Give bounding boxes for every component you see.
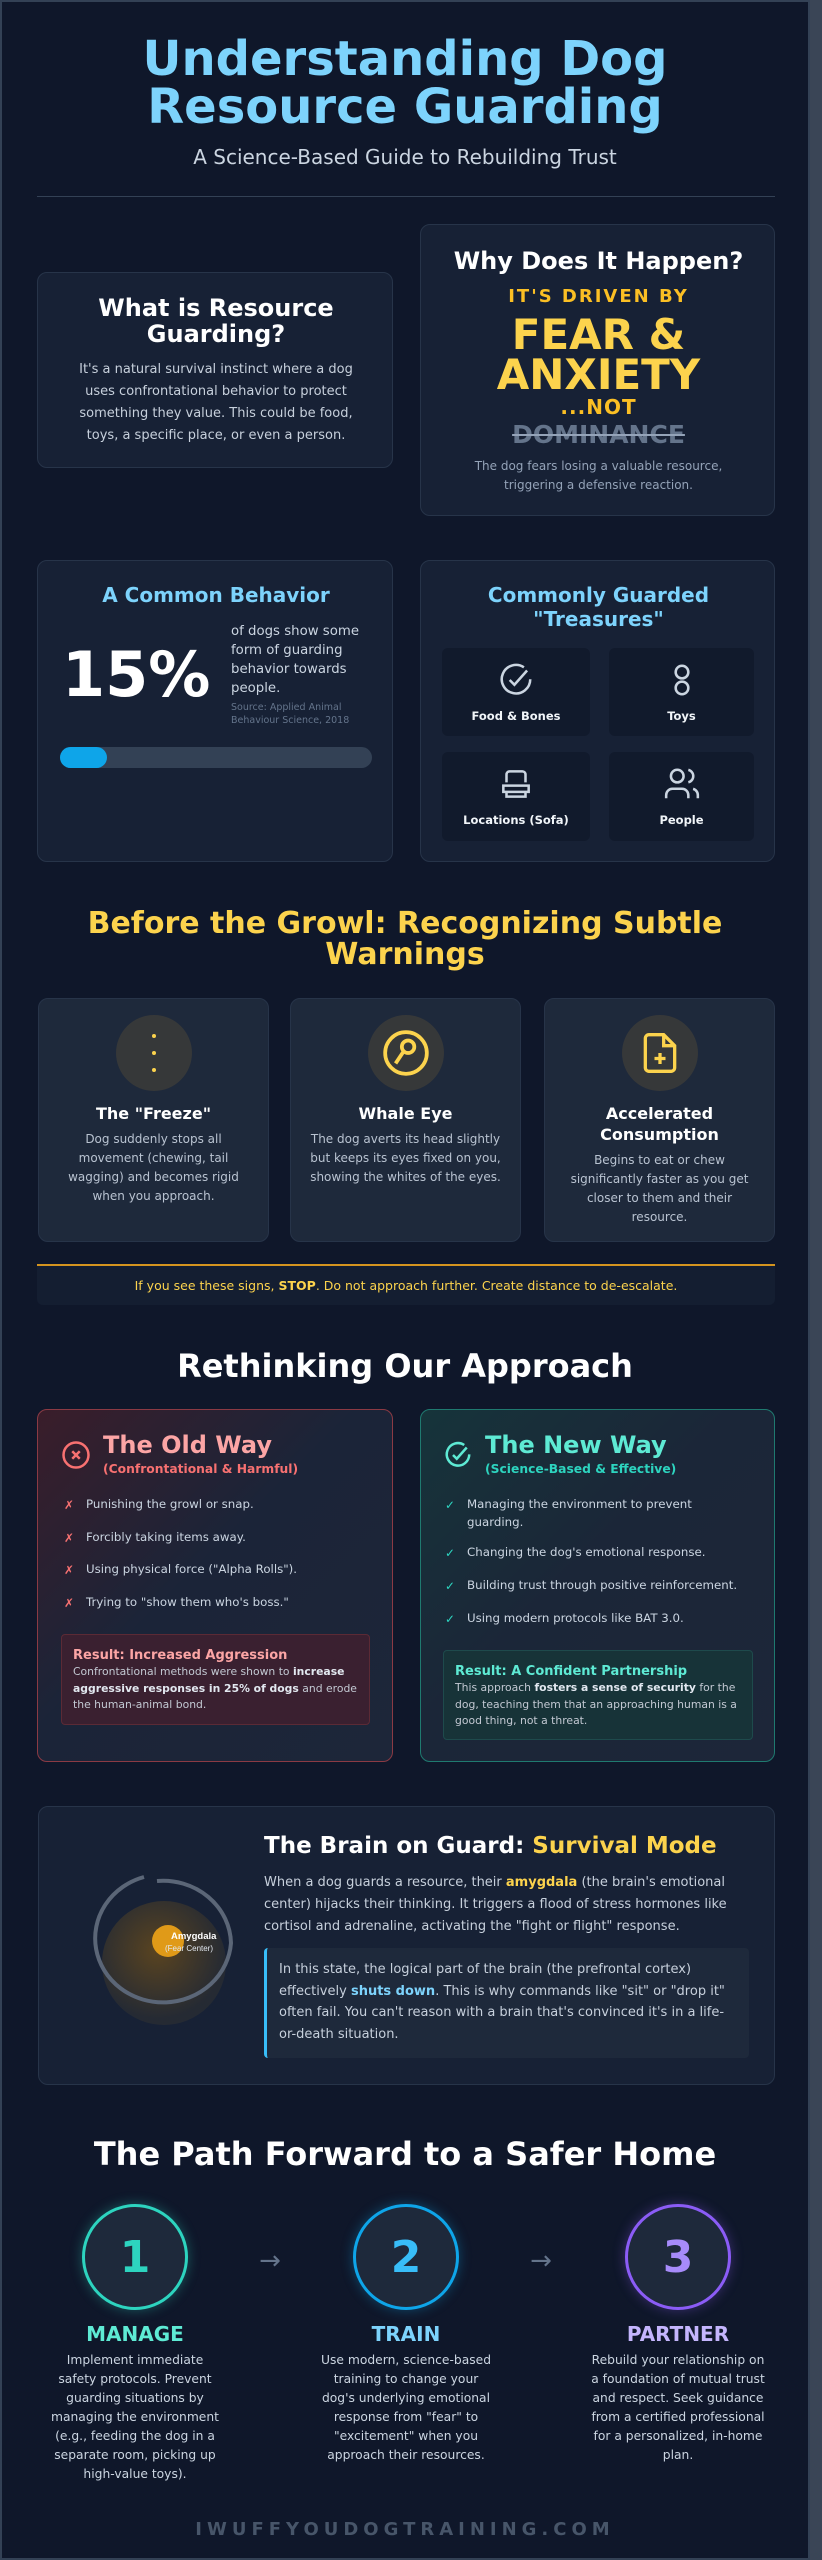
- brain diagram: (Fear Center): [165, 1944, 213, 1953]
- list: Forcibly taking items away.: [86, 1530, 246, 1544]
- tile: food: Food & Bones: [472, 709, 560, 723]
- heading: [98, 294, 334, 348]
- card: accelerated consumption: [544, 998, 775, 1242]
- tile: locations: Locations (Sofa): [463, 813, 569, 827]
- panel: brain on guard: [38, 1806, 775, 2085]
- title: [142, 31, 668, 135]
- heading: The Old Way: [103, 1431, 272, 1459]
- heading: "Treasures": [533, 607, 664, 631]
- heading: [488, 583, 709, 631]
- tile: people: [609, 752, 754, 841]
- heading: What is Resource: [98, 294, 334, 322]
- list: [64, 1497, 297, 1610]
- tile: toys: Toys: [667, 709, 696, 723]
- list: ✓: [445, 1579, 455, 1593]
- heading: rethinking: Rethinking Our Approach: [177, 1347, 633, 1385]
- caption: The dog fears losing a valuable resource, triggering a defensive reaction.: [475, 459, 722, 492]
- panel: what is resource guarding: [37, 272, 393, 468]
- result box: Result: A Confident Partnership: [455, 1664, 687, 1679]
- list: Building trust through positive reinforcement.: [467, 1578, 737, 1592]
- tile: locations: [442, 752, 590, 841]
- result box: Result: Increased Aggression: [73, 1648, 287, 1663]
- panel: common behavior: [37, 560, 393, 862]
- fear & anxiety: ANXIETY: [497, 350, 700, 399]
- fear & anxiety: FEAR &: [512, 310, 685, 359]
- list: ✓: [445, 1612, 455, 1626]
- list: ✗: [64, 1563, 74, 1577]
- not dominance: [512, 395, 685, 449]
- subheading: (Confrontational & Harmful): [103, 1462, 298, 1476]
- list: Using modern protocols like BAT 3.0.: [467, 1611, 684, 1625]
- driven by text: IT'S DRIVEN BY: [508, 286, 689, 307]
- step: train: 2: [391, 2232, 421, 2282]
- subheading: (Science-Based & Effective): [485, 1462, 676, 1476]
- text: TRAIN: [372, 2322, 440, 2346]
- step: partner: 3: [663, 2232, 693, 2282]
- card: accelerated consumption: Accelerated: [606, 1104, 713, 1123]
- result box: [443, 1650, 753, 1740]
- title: Resource Guarding: [147, 79, 663, 135]
- heading: before the growl: Warnings: [325, 937, 485, 972]
- stat 15%: 15%: [62, 638, 210, 711]
- footer: IWUFFYOUDOGTRAINING.COM: [195, 2519, 615, 2540]
- arrow: →: [530, 2246, 552, 2276]
- subtitle: A Science-Based Guide to Rebuilding Trust: [193, 145, 617, 169]
- panel: commonly guarded treasures: [420, 560, 775, 862]
- text block: When a dog guards a resource, their amygdala (the brain's emotional center) hijacks their thinking. It triggers a flood of stress hormones like cortisol and adrenaline, activating the "fight or flight" response.: [264, 1875, 727, 1934]
- heading: path forward: The Path Forward to a Safer Home: [94, 2135, 716, 2173]
- not dominance: DOMINANCE: [512, 420, 685, 449]
- card: whale eye: [290, 998, 521, 1242]
- icon: eye search: [368, 1015, 444, 1091]
- result box: Confrontational methods were shown to increase aggressive responses in 25% of dogs and erode the human-animal bond.: [73, 1665, 357, 1711]
- icon: x circle: [62, 1441, 90, 1469]
- heading: Guarding?: [147, 320, 285, 348]
- icon: dots: [116, 1015, 192, 1091]
- arrow: →: [259, 2246, 281, 2276]
- heading: The New Way: [485, 1431, 667, 1459]
- step: partner: [591, 2198, 765, 2462]
- step: manage: 1: [120, 2232, 150, 2282]
- list: Managing the environment to prevent guarding.: [467, 1497, 692, 1529]
- brain diagram: [93, 1875, 233, 2025]
- card: freeze: The "Freeze": [96, 1104, 211, 1123]
- heading: A Common Behavior: [102, 583, 330, 607]
- text: MANAGE: [86, 2322, 184, 2346]
- list: Changing the dog's emotional response.: [467, 1545, 706, 1559]
- text: PARTNER: [627, 2322, 729, 2346]
- text: Rebuild your relationship on a foundation of mutual trust and respect. Seek guidance from a certified professional for a personalized, in-home plan.: [591, 2353, 765, 2462]
- card: whale eye: Whale Eye: [359, 1104, 452, 1123]
- card: accelerated consumption: Begins to eat or chew significantly faster as you get closer to them and their resource.: [571, 1153, 748, 1224]
- list: ✗: [64, 1530, 74, 1544]
- result box: This approach fosters a sense of security for the dog, teaching them that an approaching human is a good thing, not a threat.: [455, 1681, 737, 1727]
- stat text: of dogs show some form of guarding behavior towards people.: [231, 624, 359, 696]
- callout: shuts down: In this state, the logical part of the brain (the prefrontal cortex) effectively shuts down. This is why commands like "sit" or "drop it" often fail. You can't reason with a brain that's convinced it's in a life-or-death situation.: [279, 1962, 725, 2042]
- card: freeze: Dog suddenly stops all movement (chewing, tail wagging) and becomes rigid when you approach.: [68, 1132, 239, 1203]
- text: Use modern, science-based training to change your dog's underlying emotional response from "fear" to "excitement" when you approach their resources.: [321, 2353, 491, 2462]
- panel: new way: [420, 1409, 775, 1762]
- heading: before the growl: [88, 906, 722, 972]
- panel: old way: [37, 1409, 393, 1762]
- heading: before the growl: Before the Growl: Recognizing Subtle: [88, 906, 722, 941]
- heading: Commonly Guarded: [488, 583, 709, 607]
- panel: why does it happen: [420, 224, 775, 516]
- card: accelerated consumption: Consumption: [600, 1125, 719, 1144]
- list: Using physical force ("Alpha Rolls").: [86, 1562, 297, 1576]
- tile: toys: [609, 648, 754, 736]
- step: manage: [51, 2198, 219, 2481]
- list: Trying to "show them who's boss.": [86, 1594, 289, 1608]
- callout: shuts down: [264, 1948, 749, 2058]
- list: Punishing the growl or snap.: [86, 1497, 254, 1511]
- heading: Why Does It Happen?: [454, 247, 743, 275]
- not dominance: ...NOT: [560, 395, 637, 419]
- stat text: Source: Applied Animal Behaviour Science, 2018: [231, 702, 349, 726]
- brain diagram: Amygdala: [171, 1931, 217, 1942]
- icon: check circle: [445, 1442, 470, 1467]
- title: Understanding Dog: [142, 31, 668, 87]
- tile: food: [442, 648, 590, 736]
- result box: [61, 1634, 370, 1725]
- list: ✗: [64, 1498, 74, 1512]
- icon: file plus: [622, 1015, 698, 1091]
- progress bar: [60, 747, 372, 768]
- card: whale eye: The dog averts its head slightly but keeps its eyes fixed on you, showing the whites of the eyes.: [310, 1132, 501, 1184]
- fear & anxiety: [497, 310, 700, 399]
- text: Implement immediate safety protocols. Prevent guarding situations by managing the environment (e.g., feeding the dog in a separate room, picking up high-value toys).: [51, 2353, 219, 2481]
- callout: stop: If you see these signs, STOP. Do not approach further. Create distance to de-escalate.: [135, 1278, 677, 1293]
- callout: stop: [37, 1264, 775, 1305]
- tile: people: People: [659, 813, 704, 827]
- heading: The Brain on Guard: Survival Mode: [264, 1833, 717, 1859]
- list: ✓: [445, 1546, 455, 1560]
- card: freeze: [38, 998, 269, 1242]
- list: ✗: [64, 1596, 74, 1610]
- step: train: [321, 2198, 491, 2462]
- list: ✓: [445, 1498, 455, 1512]
- text block: It's a natural survival instinct where a dog uses confrontational behavior to protect something they value. This could be food, toys, a specific place, or even a person.: [79, 362, 353, 443]
- list: [445, 1497, 737, 1626]
